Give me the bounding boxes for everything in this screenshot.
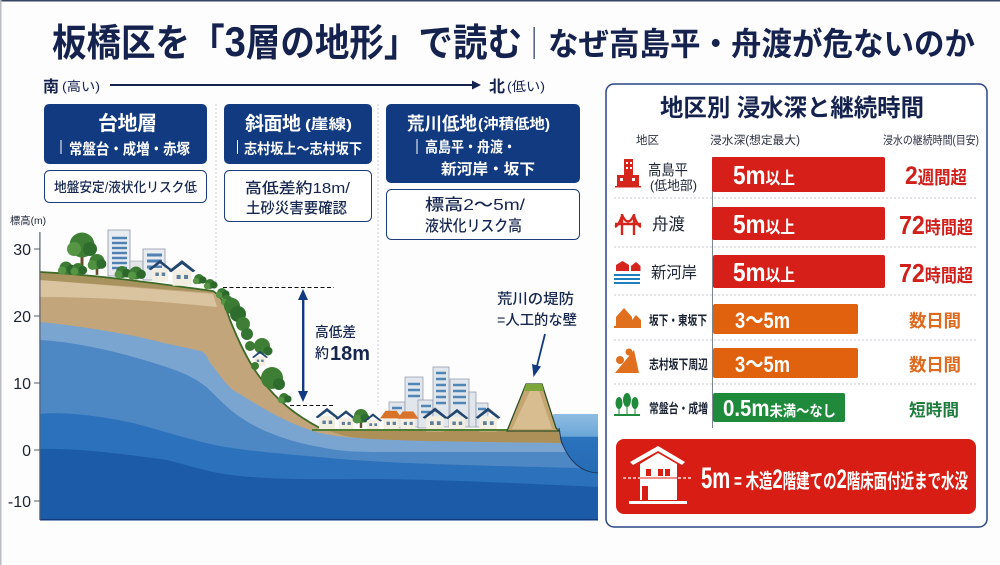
- column dividers: [216, 104, 378, 405]
- icon: flooded house: [623, 446, 693, 504]
- levee callout: =人工的な壁: [497, 312, 577, 329]
- direction arrow: south to north: 北: [489, 78, 505, 96]
- row: Shimura-Sakashita area: [615, 348, 961, 378]
- row: Funado: 72時間超: [899, 210, 973, 240]
- panel: Arakawa lowland layer: 液状化リスク高: [425, 217, 522, 235]
- height difference marker: 約: [315, 345, 329, 361]
- row: Takashimadaira: (低地部): [650, 178, 697, 193]
- row: Tokiwadai and Narimasu: [614, 393, 959, 422]
- panel: slope layer: (崖線): [305, 116, 352, 132]
- river levee: [507, 384, 559, 431]
- plateau buildings and trees: [58, 230, 218, 289]
- panel: plateau layer: 台地層: [98, 112, 157, 135]
- terrain: soil and groundwater layers: [40, 272, 598, 520]
- row: Shimura-Sakashita area: 3～5m: [735, 352, 790, 377]
- row: Funado: 5m以上: [733, 209, 795, 239]
- column headers: [636, 133, 979, 147]
- callout banner: meaning of 5m: [616, 439, 976, 514]
- title: [52, 18, 975, 65]
- panel: slope layer: 志村坂上～志村坂下: [244, 140, 362, 158]
- row: Takashimadaira: 5m以上: [733, 160, 795, 190]
- row: Takashimadaira: 2週間超: [905, 162, 967, 190]
- elevation axis: 30: [13, 242, 31, 259]
- panel: Arakawa lowland layer: [386, 104, 580, 240]
- panel: slope layer: 高低差約18m/: [245, 180, 351, 197]
- row: Sakashita and Higashi-Sakashita: 3～5m: [735, 308, 790, 333]
- row: Sakashita and Higashi-Sakashita: [614, 304, 961, 334]
- panel: Arakawa lowland layer: 標高2～5m/: [425, 196, 526, 214]
- panel: plateau layer: 常盤台・成増・赤塚: [69, 140, 190, 158]
- panel: plateau layer: 地盤安定/液状化リスク低: [54, 180, 197, 195]
- row: Tokiwadai and Narimasu: 0.5m未満～なし: [723, 395, 836, 421]
- elevation axis: 0: [22, 443, 31, 460]
- panel: slope layer: [224, 104, 372, 222]
- panel: flood depth and duration by district: [606, 84, 987, 527]
- elevation axis: -10: [8, 494, 31, 511]
- direction arrow: south to north: 南: [43, 78, 59, 96]
- title: 板橋区を「3層の地形」で読む: [52, 18, 522, 65]
- elevation axis: 10: [13, 376, 31, 393]
- levee callout: 荒川の堤防: [497, 291, 574, 308]
- row: Shimura-Sakashita area: 志村坂下周辺: [649, 357, 708, 372]
- height difference marker: 18m: [330, 343, 370, 365]
- column headers: 浸水深(想定最大): [710, 133, 800, 147]
- panel title: 地区別 浸水深と継続時間: [660, 95, 924, 122]
- panel: Arakawa lowland layer: 荒川低地: [407, 114, 477, 134]
- panel: Arakawa lowland layer: 新河岸・坂下: [441, 160, 535, 178]
- panel: Arakawa lowland layer: 高島平・舟渡・: [425, 138, 516, 156]
- panel: plateau layer: [44, 104, 207, 202]
- title: なぜ高島平・舟渡が危ないのか: [548, 26, 975, 62]
- row: Takashimadaira: [615, 157, 967, 193]
- direction arrow: south to north: [43, 78, 545, 96]
- height difference marker: 高低差: [315, 324, 356, 340]
- elevation axis: 20: [13, 309, 31, 326]
- row: Shingashi: 新河岸: [651, 264, 697, 282]
- slope trees and house: [216, 288, 292, 403]
- row: Funado: 舟渡: [652, 215, 685, 234]
- panel: Arakawa lowland layer: (沖積低地): [478, 115, 550, 133]
- seabed line: [559, 428, 598, 473]
- column headers: 浸水の継続時間(目安): [883, 133, 979, 147]
- row: Shingashi: 72時間超: [899, 258, 973, 288]
- row: Takashimadaira: 高島平: [648, 162, 688, 179]
- row: Sakashita and Higashi-Sakashita: 数日間: [909, 311, 961, 331]
- elevation axis: [8, 214, 46, 520]
- panel: slope layer: 斜面地: [245, 113, 301, 135]
- panel: slope layer: 土砂災害要確認: [246, 200, 347, 217]
- terrain: river water: [553, 414, 598, 520]
- row: Shingashi: 5m以上: [733, 257, 795, 287]
- row: Tokiwadai and Narimasu: 短時間: [909, 401, 959, 420]
- row: Sakashita and Higashi-Sakashita: 坂下・東坂下: [649, 313, 707, 328]
- height difference marker: [223, 288, 370, 406]
- elevation axis: 標高(m): [10, 214, 46, 227]
- direction arrow: south to north: (低い): [507, 79, 545, 94]
- row: Tokiwadai and Narimasu: 常盤台・成増: [649, 401, 708, 416]
- row: Shimura-Sakashita area: 数日間: [909, 355, 961, 375]
- lowland town: [312, 367, 507, 431]
- row: Funado: [615, 207, 973, 240]
- cross-section diagram: [40, 230, 598, 520]
- column headers: 地区: [636, 134, 659, 147]
- direction arrow: south to north: (高い): [62, 79, 100, 94]
- row: Shingashi: [614, 255, 973, 288]
- levee callout: [497, 291, 577, 377]
